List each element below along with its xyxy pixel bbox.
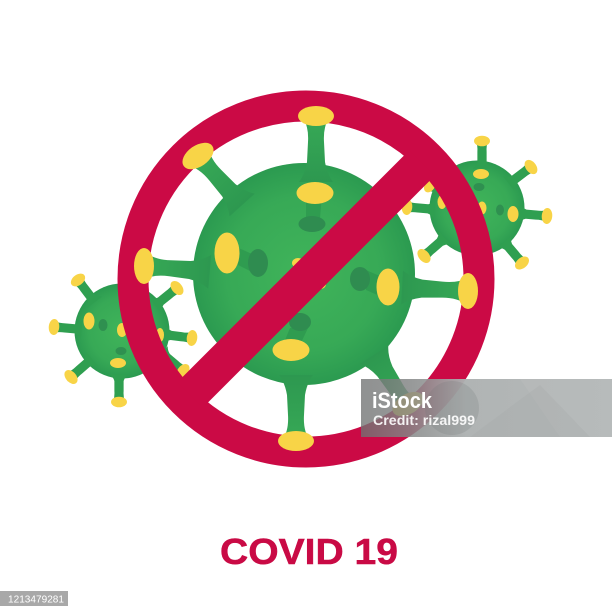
- inner spike: top: [296, 182, 334, 232]
- small virus: right: [401, 136, 553, 273]
- main virus: [143, 116, 469, 441]
- title: COVID 19: [220, 531, 398, 572]
- main virus spike caps: [134, 106, 478, 451]
- small virus: left: [48, 270, 198, 407]
- inner spike: bottom: [272, 313, 311, 361]
- image id tag: 1213479281: [8, 594, 64, 606]
- watermark credit: Credit: rizal999: [373, 412, 475, 428]
- inner spike: left: [214, 232, 268, 277]
- watermark logo: iStock: [372, 388, 433, 413]
- prohibition sign: [133, 106, 479, 452]
- image id tag: [0, 591, 68, 606]
- inner spike: right: [350, 267, 400, 306]
- watermark banner: [361, 379, 612, 437]
